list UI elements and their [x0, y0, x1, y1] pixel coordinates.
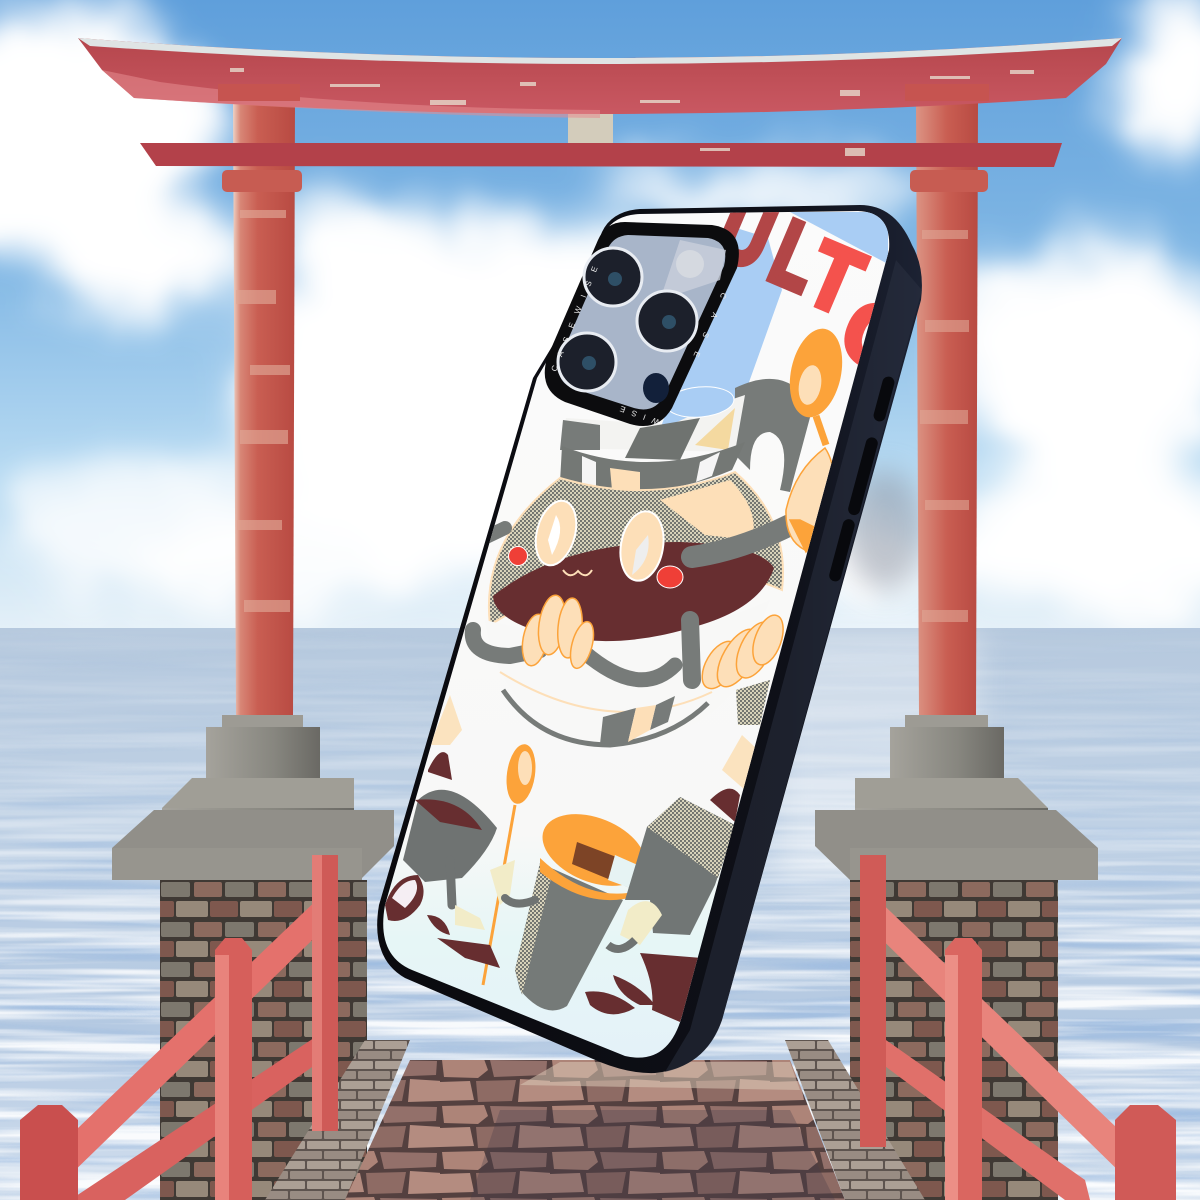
clouds — [0, 0, 1200, 620]
top beam — [78, 38, 1122, 156]
centre strut — [568, 104, 613, 144]
camera module — [544, 222, 739, 427]
left railing — [20, 855, 338, 1200]
small side hands — [430, 695, 462, 745]
red lettering: L — [757, 200, 835, 311]
shaker — [608, 797, 735, 949]
sea — [0, 628, 1200, 1200]
CASEWISE ring text: WISE — [612, 402, 661, 427]
beans — [427, 915, 702, 1022]
coffee pot glass body — [485, 472, 783, 745]
blue reflection — [790, 212, 888, 264]
left pillar — [222, 100, 302, 716]
phone — [377, 205, 922, 1074]
pillar caps — [218, 84, 300, 101]
sky background — [0, 0, 1200, 630]
spoon — [790, 328, 842, 446]
CASEWISE ring text: CASEWISE — [552, 266, 598, 371]
right pillar — [910, 100, 988, 716]
right stone base — [815, 715, 1098, 1200]
CASEWISE ring text: CASE — [694, 293, 726, 358]
cup — [385, 790, 497, 921]
right railing — [860, 855, 1176, 1200]
red lettering: T — [792, 222, 877, 336]
coffee pot neck — [560, 384, 745, 495]
coffee pot handle — [735, 379, 812, 492]
phone case artwork — [383, 211, 890, 1058]
coffee blobs — [428, 752, 452, 780]
eyes and mouth — [508, 496, 683, 588]
left stone base — [112, 715, 394, 1200]
hands — [519, 448, 833, 695]
stone path — [265, 1040, 925, 1200]
lower beam — [140, 143, 1062, 167]
red lettering: U — [704, 175, 789, 289]
phone body — [377, 205, 922, 1073]
camera lenses — [558, 248, 697, 391]
orange spoon two — [483, 742, 539, 985]
thermos — [515, 814, 641, 1010]
arms — [473, 525, 790, 680]
cream splashes — [490, 860, 515, 905]
torii gate — [78, 38, 1122, 716]
red lettering — [724, 212, 875, 365]
side buttons — [828, 375, 896, 583]
red lettering: C — [828, 278, 925, 394]
coffee — [493, 542, 774, 641]
CASEWISE ring text — [552, 266, 726, 427]
flash and sensor — [676, 250, 704, 278]
